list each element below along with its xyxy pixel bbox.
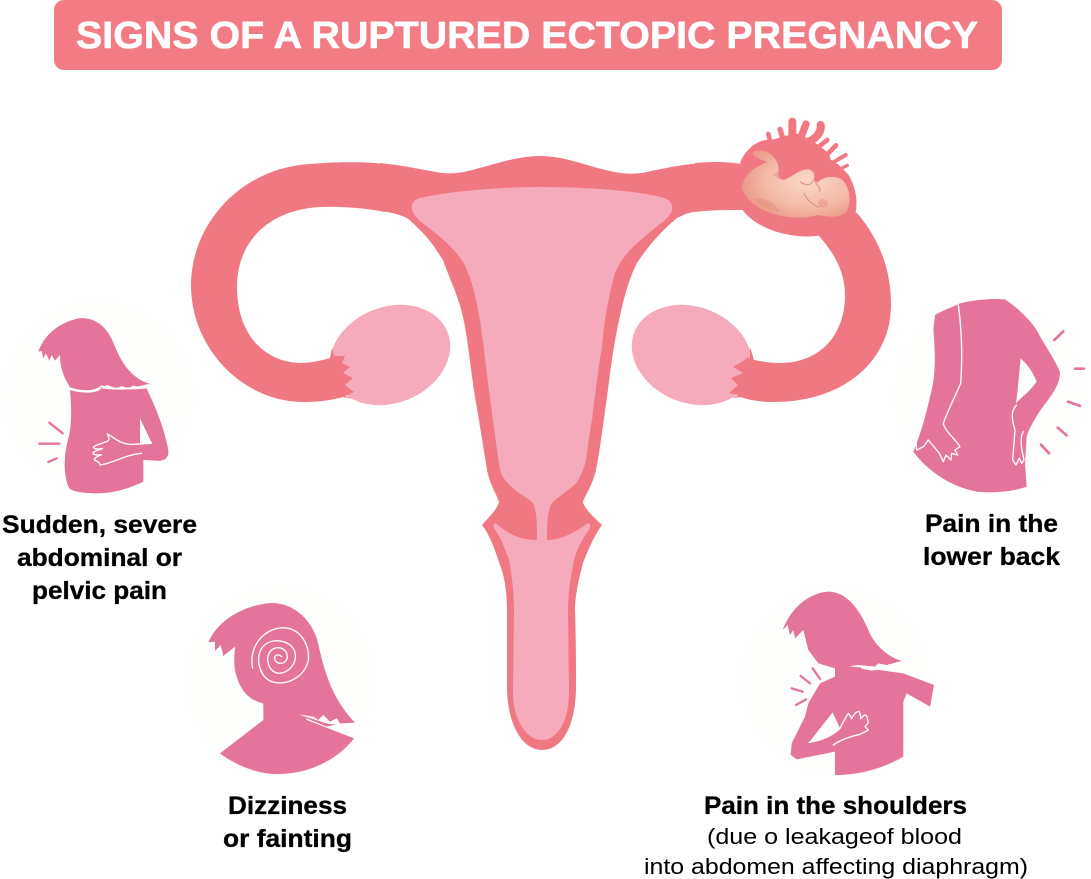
- title banner: SIGNS OF A RUPTURED ECTOPIC PREGNANCY: [76, 15, 978, 57]
- rupture site with fetus: [741, 122, 856, 236]
- label: [223, 792, 352, 853]
- left ovary: [315, 287, 465, 423]
- fetus: [742, 150, 849, 218]
- left fallopian tube: [191, 162, 385, 402]
- label: Pain in the: [925, 510, 1058, 538]
- label: [2, 511, 197, 605]
- symptom: dizziness: [183, 583, 376, 853]
- fetus shading: [753, 169, 828, 212]
- label: [644, 792, 1028, 879]
- icon: woman holding abdomen: [1, 298, 196, 493]
- label: Dizziness: [228, 792, 347, 820]
- vaginal canal: [494, 523, 590, 740]
- symptom: shoulder pain: [644, 583, 1028, 879]
- label: into abdomen affecting diaphragm): [644, 854, 1028, 879]
- symptom: abdominal pain: [1, 298, 197, 605]
- icon: woman holding shoulder: [738, 583, 934, 777]
- label: abdominal or: [17, 544, 182, 572]
- rupture bulge: [741, 122, 856, 236]
- title banner: [54, 0, 1002, 70]
- label: lower back: [923, 543, 1060, 571]
- uterus wall: [380, 156, 700, 750]
- right ovary: [617, 287, 767, 423]
- label: Pain in the shoulders: [704, 792, 967, 820]
- uterus diagram: [191, 122, 891, 750]
- label: [923, 510, 1060, 571]
- symptom: lower back pain: [892, 298, 1088, 571]
- label: pelvic pain: [32, 577, 167, 605]
- uterine cavity: [412, 187, 672, 540]
- right fallopian tube: [695, 162, 891, 402]
- label: (due o leakageof blood: [707, 824, 962, 849]
- icon: woman holding lower back: [892, 298, 1088, 495]
- label: Sudden, severe: [2, 511, 197, 539]
- icon: head with spiral: [183, 583, 376, 776]
- label: or fainting: [223, 825, 352, 853]
